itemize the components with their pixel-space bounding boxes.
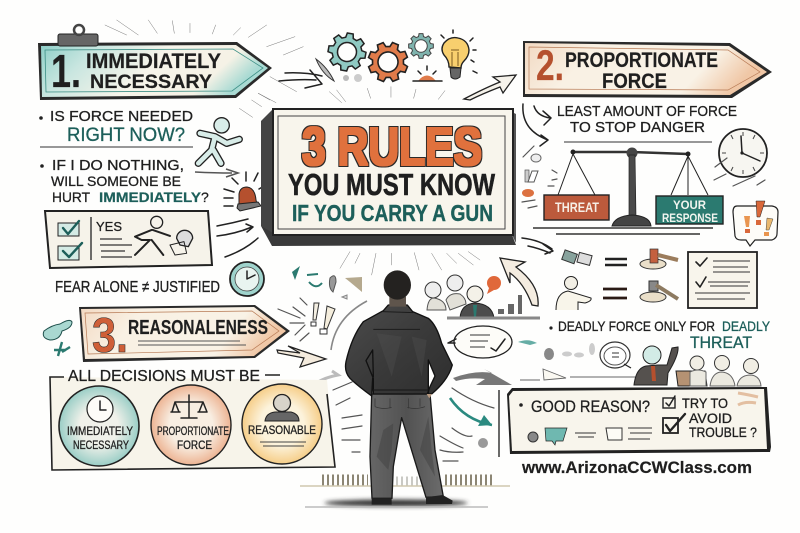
arrow: big up arrow (500, 258, 538, 306)
text: if I do nothing (40, 158, 209, 205)
text: deadly force only for deadly threat: DEADLY (722, 318, 771, 334)
title board (261, 109, 516, 246)
label: your response (656, 196, 723, 225)
text: is force needed right now (39, 108, 193, 147)
heading: proportionate: PROPORTIONATE (565, 49, 718, 72)
text: if I do nothing: IF I DO NOTHING, (52, 158, 184, 174)
number 2: 2. (536, 42, 564, 90)
row: person equals gavel (556, 276, 678, 310)
icon: teal sketch marks (43, 320, 72, 356)
panel: yes checklist: YES (96, 219, 122, 234)
heading: necessary: NECESSARY (90, 72, 212, 93)
text: least amount of force: TO STOP DANGER (570, 119, 705, 136)
banner 1: immediately necessary (38, 25, 272, 100)
text: try to avoid trouble: TROUBLE ? (689, 425, 757, 440)
text: deadly force only for deadly threat: DEADLY FORCE ONLY FOR (558, 318, 715, 334)
number 1: 1. (51, 45, 81, 97)
heading: reasonaleness: REASONALENESS (128, 317, 268, 339)
heading: all decisions must be: ALL DECISIONS MUST BE (68, 368, 260, 385)
icon: person shielding another (135, 216, 193, 255)
text: deadly force only for deadly threat: THREAT (690, 334, 752, 352)
number 3: 3. (92, 309, 128, 363)
text: if I do nothing: WILL SOMEONE BE (51, 173, 181, 189)
badge: immediately necessary: IMMEDIATELY (67, 426, 133, 438)
title: if you carry a gun: IF YOU CARRY A GUN (292, 200, 493, 226)
pants (370, 394, 443, 498)
text: try to avoid trouble (682, 396, 757, 440)
badge: proportionate force: PROPORTIONATE (157, 426, 229, 438)
badge: immediately necessary: NECESSARY (73, 440, 129, 452)
badge: proportionate force: FORCE (177, 440, 212, 452)
arrow: to dice row (522, 238, 553, 254)
icon: teal clock (230, 262, 264, 296)
arrows: toward title (217, 219, 258, 257)
icon: wall clock (714, 129, 767, 186)
sketch marks: middle scatter (518, 340, 650, 380)
icon: light bulb (441, 30, 477, 79)
icon: teal gear (325, 30, 369, 74)
text: is force needed right now: RIGHT NOW? (67, 124, 185, 146)
arrows: around figure right side (333, 369, 512, 461)
icon: running figure (198, 118, 239, 163)
arrow: to banner 2 (464, 75, 516, 100)
heading: force: FORCE (602, 70, 667, 93)
label: your response: RESPONSE (662, 213, 718, 225)
icon: courtroom figure and jurors (634, 346, 761, 386)
icon: meeting group (425, 275, 540, 318)
banner 3: reasonableness (79, 305, 290, 363)
icon: check boxes (663, 396, 685, 433)
figure: man from behind (345, 270, 453, 505)
title: you must know: YOU MUST KNOW (288, 167, 496, 202)
text: least amount of force: LEAST AMOUNT OF FORCE (557, 103, 737, 120)
icon: equals speech bubble (600, 342, 631, 368)
small sketch marks left of scale (522, 146, 557, 208)
sketch marks: scraps above figure (292, 266, 367, 350)
text: if I do nothing: ? (201, 189, 209, 205)
text: try to avoid trouble: AVOID (689, 411, 732, 426)
badge: reasonable (242, 384, 322, 464)
label: threat: THREAT (555, 199, 599, 215)
icon: clipboard clip (58, 25, 98, 46)
icon: small teal gear (409, 34, 433, 58)
banner 2: proportionate force (523, 41, 772, 98)
icon: exclamation speech bubble (733, 201, 778, 246)
panel: checklist card (688, 252, 757, 308)
arrows: curved to text and scale (523, 104, 551, 146)
text: if I do nothing: IMMEDIATELY (99, 189, 202, 205)
badge: reasonable: REASONABLE (248, 425, 316, 437)
icon: orange gear (362, 36, 414, 88)
badge: immediately necessary (59, 386, 139, 466)
icon: half sun and pencil (316, 59, 442, 82)
grass and ground (300, 480, 510, 507)
text: fear alone not justified: FEAR ALONE ≠ JUSTIFIED (55, 279, 220, 296)
heading: immediately: IMMEDIATELY (86, 50, 221, 73)
chart: balance scale (533, 148, 723, 234)
text: website url: www.ArizonaCCWClass.com (521, 458, 752, 477)
text: try to avoid trouble: TRY TO (682, 396, 728, 411)
arrow: to decisions panel (277, 346, 338, 387)
badge: proportionate force (151, 385, 231, 465)
shoes (372, 498, 392, 505)
icon: check boxes (58, 221, 82, 260)
panel: good reason (499, 387, 771, 457)
decorative rays around banner and title (105, 20, 480, 275)
text: least amount of force (557, 103, 737, 142)
hands (427, 394, 432, 398)
label: your response: YOUR (673, 200, 707, 212)
icon: speech bubble check (448, 326, 512, 358)
arrow: to title top left (279, 70, 322, 88)
icon: small book and notes (528, 428, 652, 445)
panel: all decisions must be (50, 368, 335, 470)
icon: exclamation marks (278, 298, 335, 341)
label: threat (544, 195, 609, 220)
icon: siren light (224, 172, 264, 211)
head (389, 297, 406, 307)
panel: yes checklist (45, 211, 212, 268)
text: if I do nothing: HURT (52, 189, 90, 205)
title: 3 rules: 3 RULES (302, 117, 482, 177)
text: deadly force only for deadly threat (549, 318, 771, 352)
text: is force needed right now: IS FORCE NEEDED (50, 108, 193, 125)
arrow: motion streak (195, 169, 238, 177)
text: good reason: GOOD REASON? (531, 397, 650, 416)
jacket (345, 305, 452, 396)
row: dice equals gavel (562, 249, 678, 269)
